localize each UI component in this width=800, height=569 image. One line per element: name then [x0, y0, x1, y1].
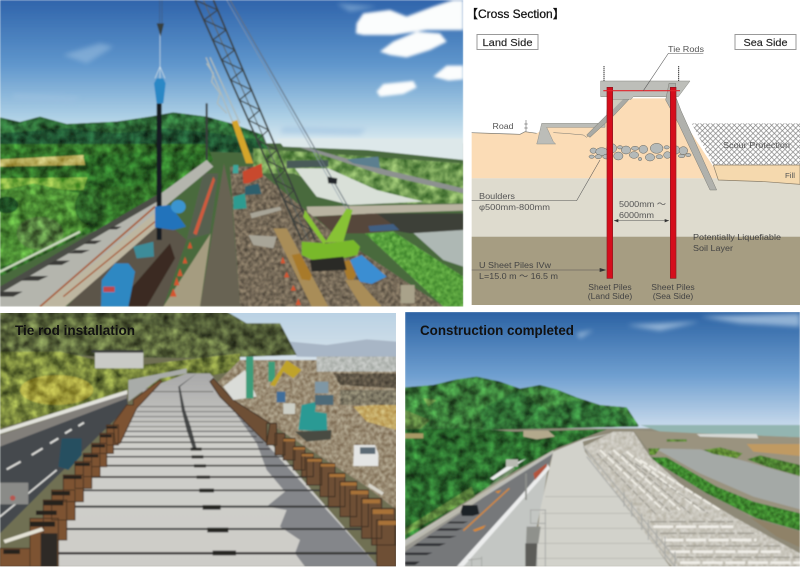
- land side slope: [587, 97, 632, 137]
- sidewalk: [460, 463, 548, 567]
- tall pile rig with blue hammer: [157, 103, 162, 240]
- photo: tie rod installation: [0, 312, 397, 568]
- sea side label: [735, 34, 796, 50]
- forested hill: [0, 312, 297, 358]
- label: sheet piles sea side: [651, 282, 695, 301]
- panel: cross section diagram: [466, 7, 800, 305]
- label: pile spacing: 5000mm ～: [619, 199, 666, 209]
- label: U sheet piles: L=15.0 m ～ 16.5 m: [479, 271, 558, 281]
- background crane: [206, 57, 240, 123]
- tie rods: [40, 392, 390, 553]
- label: liquefiable soil layer: Potentially Liquefiable: [693, 232, 781, 242]
- silt layer: [472, 178, 800, 237]
- machines along the wall: [243, 163, 263, 183]
- sky: [0, 0, 463, 143]
- scour protection hatch: [692, 123, 800, 165]
- coastal road: [0, 160, 213, 307]
- shadow on deck: [236, 413, 378, 566]
- construction yard: [230, 167, 443, 307]
- diagram title: 【Cross Section】: [466, 7, 565, 21]
- equipment box: [401, 285, 415, 303]
- ground base: [0, 143, 463, 307]
- sea side label: Sea Side: [744, 37, 788, 49]
- land side label: [477, 34, 538, 50]
- label: sheet piles sea side: Sheet Piles: [651, 282, 695, 292]
- label: sheet piles land side: [588, 282, 632, 301]
- white beam on piles: [3, 527, 44, 543]
- photo: pile driving with cranes along the seawall: [0, 0, 463, 307]
- photo: construction completed: [405, 312, 800, 568]
- sheet piles: [127, 243, 175, 307]
- label: liquefiable soil layer: [693, 232, 781, 253]
- boulders: [589, 143, 691, 161]
- black car: [461, 505, 479, 516]
- caption: construction completed: Construction completed: [420, 322, 574, 338]
- label: pile spacing: [619, 199, 666, 220]
- sea: [640, 425, 800, 437]
- sky: [405, 312, 800, 428]
- sea side slope: [666, 83, 717, 190]
- label: sheet piles land side: (Land Side): [588, 291, 632, 301]
- label: fill: Fill: [785, 171, 795, 180]
- label: scour protection: Scour Protection: [723, 140, 790, 150]
- white building: [95, 352, 143, 368]
- sea: [280, 142, 464, 162]
- roadside trees: [0, 352, 240, 428]
- white van: [353, 445, 378, 466]
- liquefiable soil layer: [472, 237, 800, 305]
- green banks: [648, 439, 800, 531]
- fill material: [713, 165, 800, 184]
- label: pile spacing: 6000mm: [619, 210, 654, 220]
- concrete wall: [200, 163, 240, 307]
- work yard: [213, 357, 397, 510]
- label: liquefiable soil layer: Soil Layer: [693, 243, 733, 253]
- guard rail and wall: [40, 213, 157, 307]
- work area behind sheet piles: [67, 228, 186, 306]
- land side sheet piles: [0, 380, 162, 567]
- main crawler crane boom: [195, 0, 315, 240]
- distant hills: [0, 112, 270, 153]
- anchors: [604, 66, 679, 81]
- dike crown: [535, 433, 670, 567]
- sand layer: [472, 98, 720, 178]
- orange center line: [463, 488, 509, 531]
- thin clouds: [577, 313, 800, 338]
- green mountain: [405, 377, 639, 430]
- coastal road: [405, 452, 553, 567]
- white fence: [0, 232, 80, 272]
- sea side sheet piles: [210, 378, 396, 567]
- clouds: [356, 0, 463, 97]
- label: U sheet piles: U Sheet Piles IVw: [479, 260, 552, 270]
- sheet pile land side: [607, 87, 613, 278]
- blue excavator on road: [58, 438, 82, 470]
- forest: [405, 427, 607, 540]
- teal towers: [246, 357, 275, 398]
- far shore: road, grass, river: [253, 148, 463, 203]
- road fence: [524, 120, 528, 132]
- caption: tie rod installation: Tie rod installation: [15, 322, 135, 338]
- leader lines: [472, 53, 703, 270]
- brown bank corner: [750, 517, 800, 547]
- label: boulder size: φ500mm-800mm: [479, 202, 550, 212]
- river: [655, 448, 800, 509]
- road stripes: [405, 522, 468, 565]
- high cloud streaks: [64, 2, 374, 136]
- handrail: [468, 447, 677, 567]
- land side wall: [537, 123, 605, 144]
- sky and distant mountain: [220, 312, 397, 362]
- red cones: [170, 242, 301, 305]
- arrowheads: [600, 219, 669, 272]
- armour blocks: [583, 432, 800, 567]
- sheet pile sea side: [670, 87, 676, 278]
- distant buildings: [523, 431, 555, 439]
- label: sheet piles sea side: (Sea Side): [653, 291, 693, 301]
- road sign: [0, 483, 28, 504]
- coastal road: [0, 397, 128, 533]
- ground base: [0, 354, 396, 566]
- label: U sheet piles: [479, 260, 558, 281]
- road sign: [506, 459, 518, 467]
- soil layers and structure: [472, 53, 800, 305]
- yellow machinery and vehicles: [270, 360, 302, 387]
- left fields: [0, 144, 213, 277]
- land side label: Land Side: [482, 37, 533, 49]
- label: sheet piles land side: Sheet Piles: [588, 282, 632, 292]
- white slope: [223, 370, 257, 400]
- beach: [633, 430, 800, 517]
- label: road: Road: [492, 121, 514, 131]
- blue tarp: [350, 255, 387, 284]
- tie rod: [603, 89, 680, 92]
- label: tie rods: Tie Rods: [668, 44, 704, 54]
- ground base: [405, 427, 800, 568]
- concrete deck: [57, 373, 378, 567]
- access stair: [526, 527, 541, 544]
- teal excavator: [298, 402, 327, 432]
- crawler crane body: [302, 240, 360, 263]
- tie rod couplers: [191, 448, 236, 555]
- label: boulders: Boulders: [479, 191, 515, 201]
- walkway: [163, 233, 211, 307]
- blue generator: [101, 263, 135, 307]
- concrete cap: [601, 81, 690, 99]
